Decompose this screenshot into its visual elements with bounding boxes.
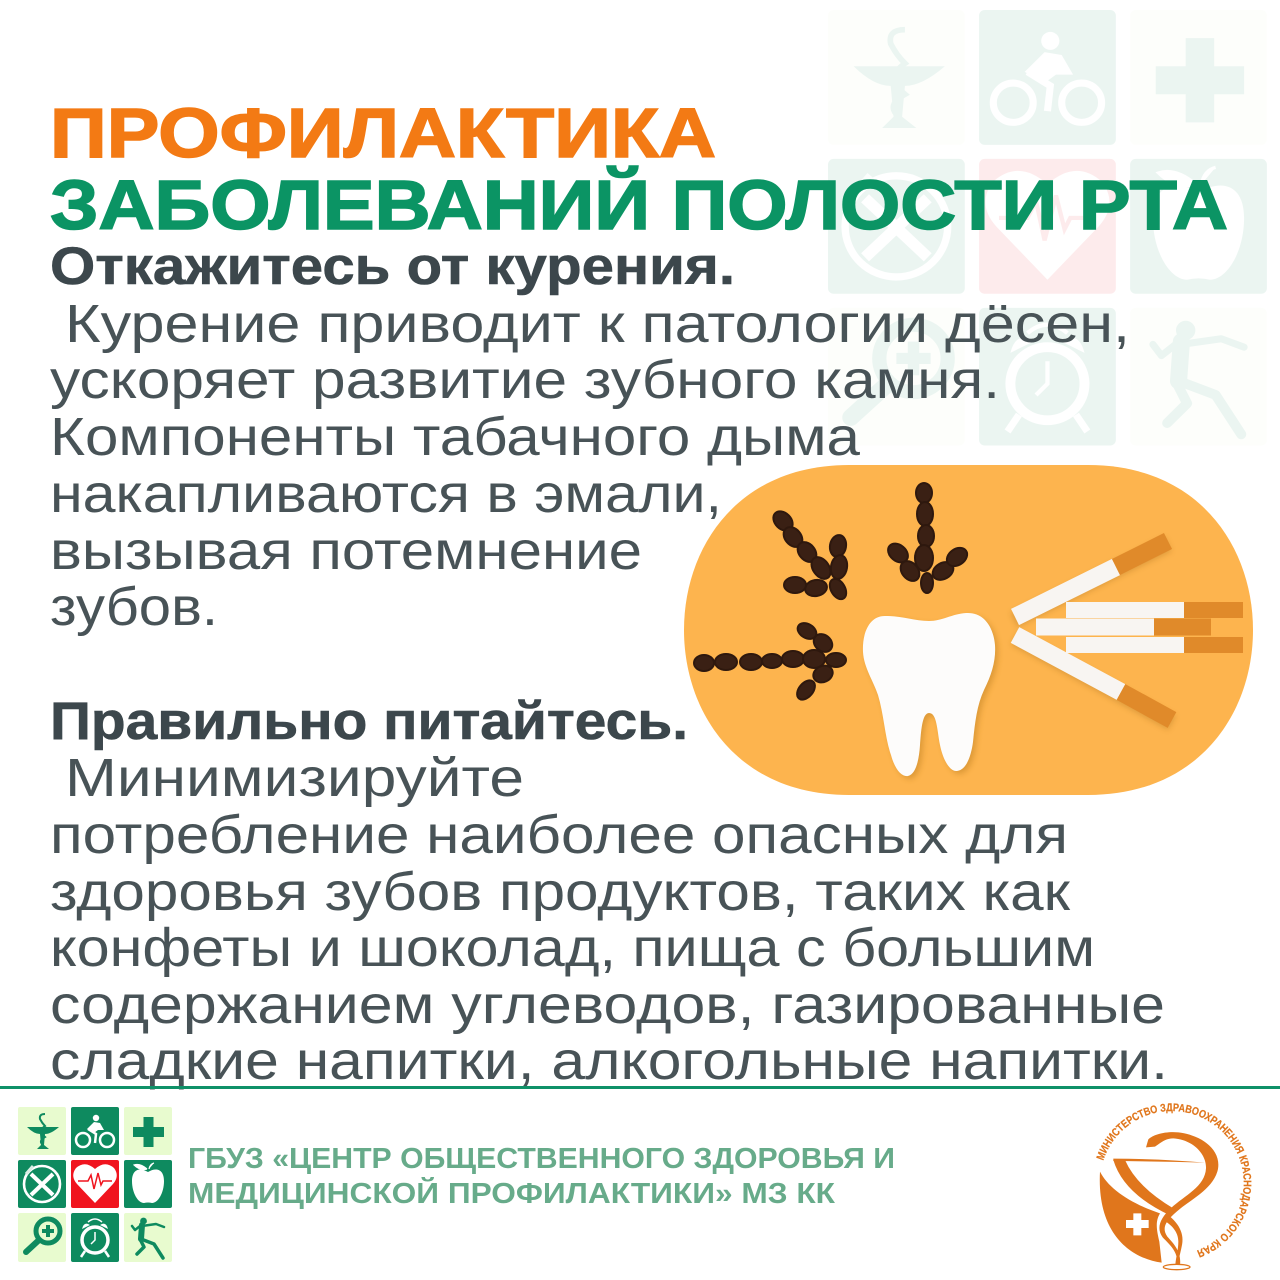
- tooth: [863, 613, 998, 779]
- text block: quit smoking: ускоряет развитие зубного камня.: [50, 350, 1000, 410]
- logo: health icon grid: [18, 1107, 172, 1262]
- text block: quit smoking: зубов.: [50, 577, 218, 637]
- organisation name: [188, 1143, 895, 1210]
- text block: eat properly: потребление наиболее опасных для: [50, 805, 1068, 865]
- cigarettes: [1014, 541, 1243, 723]
- footer divider line: [0, 1086, 1280, 1089]
- coffee bean arrow: downward: [884, 483, 971, 593]
- text block: quit smoking: Курение приводит к патологии дёсен,: [65, 294, 1130, 354]
- text block: eat properly: содержанием углеводов, газированные: [50, 975, 1165, 1035]
- organisation name: МЕДИЦИНСКОЙ ПРОФИЛАКТИКИ» МЗ КК: [188, 1176, 835, 1210]
- watermark: faded health icon grid: [828, 10, 1267, 446]
- text block: quit smoking: Компоненты табачного дыма: [50, 407, 861, 467]
- text block: quit smoking: вызывая потемнение: [50, 521, 642, 581]
- text block: quit smoking: [50, 237, 1130, 637]
- text block: eat properly: Минимизируйте: [65, 748, 524, 808]
- text block: quit smoking: накапливаются в эмали,: [50, 464, 722, 524]
- coffee bean arrow: diagonal: [770, 508, 850, 602]
- title: ПРОФИЛАКТИКА: [50, 94, 716, 172]
- text block: eat properly: здоровья зубов продуктов, таких как: [50, 862, 1070, 922]
- text block: eat properly: сладкие напитки, алкогольные напитки.: [50, 1031, 1168, 1091]
- organisation name: ГБУЗ «ЦЕНТР ОБЩЕСТВЕННОГО ЗДОРОВЬЯ И: [188, 1143, 895, 1175]
- illustration: tooth, coffee arrows and cigarettes on orange pill: [684, 465, 1253, 795]
- text block: eat properly: конфеты и шоколад, пища с большим: [50, 918, 1095, 978]
- text block: quit smoking: Откажитесь от курения.: [50, 237, 735, 296]
- text block: eat properly: [50, 692, 1168, 1091]
- logo: ministry emblem: МИНИСТЕРСТВО ЗДРАВООХРАНЕНИЯ КРАСНОДАРСКОГО КРАЯ: [1096, 1103, 1252, 1258]
- title: ЗАБОЛЕВАНИЙ ПОЛОСТИ РТА: [50, 165, 1228, 244]
- title: [50, 94, 1228, 244]
- text block: eat properly: Правильно питайтесь.: [50, 692, 688, 751]
- coffee bean arrow: horizontal: [694, 620, 846, 703]
